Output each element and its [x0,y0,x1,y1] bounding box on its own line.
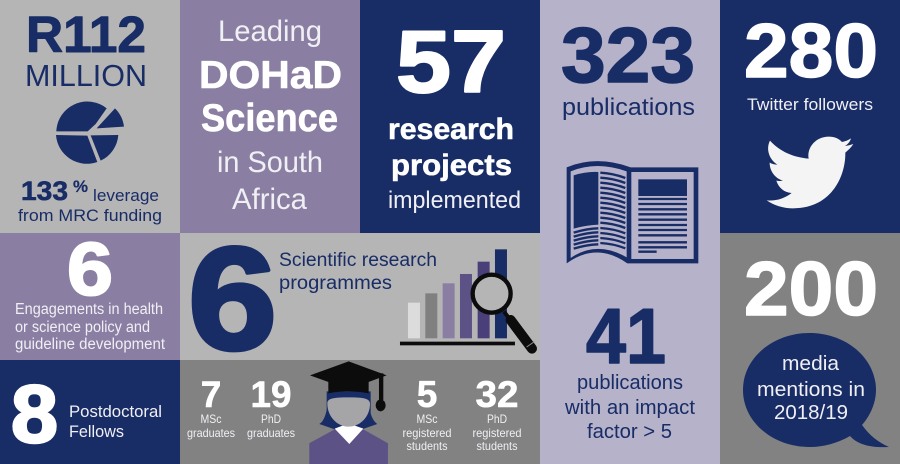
text: media mentions: 2018/19 [774,402,848,424]
panel: twitter [720,0,900,233]
text: impact publications: publications [577,372,683,394]
icon: bar chart with magnifier [400,249,534,349]
stat: 32 PhD registered students: registered [472,426,522,440]
stat: 19 PhD graduates [247,374,295,440]
heading: R112: R112 [26,6,146,63]
text: research projects: projects [391,149,512,182]
stat: 5 MSc registered students: registered [402,426,452,440]
panel: funding [0,0,180,233]
number: big 6: 6 [188,217,277,380]
stat: 19 PhD graduates: graduates [247,426,295,440]
panel: engagements [0,227,180,360]
text: leverage: leverage [93,187,159,205]
number: 6: 6 [67,227,113,311]
text: leading: Leading [218,15,322,48]
icon: speech bubble [743,333,889,447]
panel: graduates [180,360,540,464]
text: publications: publications [562,94,695,121]
text: impact publications [564,372,695,443]
stat: 19 PhD graduates: 19 [250,374,292,415]
text: research projects: research [388,113,514,146]
text: scientific research programmes: Scientific research [279,250,437,271]
heading: million: MILLION [25,58,147,93]
stat: 32 PhD registered students [472,374,522,453]
stat: 5 MSc registered students: 5 [417,374,437,415]
number: 41: 41 [586,292,666,380]
number: 200: 200 [744,247,878,332]
text: impact publications: with an impact [564,397,695,419]
text: engagements: or science policy and [15,319,150,336]
number: 280: 280 [744,9,878,94]
text: scientific research programmes: programmes [279,273,392,294]
stat: 32 PhD registered students: students [476,439,518,453]
text: in South Africa: Africa [232,183,307,216]
text: postdoctoral fellows: Postdoctoral [69,403,162,421]
stat: 7 MSc graduates: MSc [200,412,222,426]
text: leverage: from MRC funding [18,207,162,225]
stat: 32 PhD registered students: PhD [487,412,507,426]
stat: 5 MSc registered students: students [406,439,448,453]
stat: 7 MSc graduates: graduates [187,426,235,440]
icon: graduate [309,361,388,464]
stat: 32 PhD registered students: 32 [476,374,518,415]
icon: pie chart [56,102,124,164]
stat: 19 PhD graduates: PhD [261,412,281,426]
stat: 7 MSc graduates: 7 [201,374,221,415]
panel: leading science [180,0,360,233]
number: 323: 323 [561,11,695,99]
text: media mentions [757,353,865,424]
text: media mentions: mentions in [757,379,865,401]
text: engagements [15,301,166,353]
heading: DOHaD: DOHaD [199,54,342,97]
heading: Science: Science [201,97,338,140]
text: engagements: Engagements in health [15,301,163,318]
stat: 5 MSc registered students [402,374,452,453]
text: in South Africa [217,146,323,216]
panel: publications [540,0,720,464]
number: 57: 57 [396,12,506,111]
panel: research projects [360,0,540,233]
icon: open book [567,161,698,263]
panel: postdoctoral fellows [0,360,180,464]
text: twitter followers: Twitter followers [747,95,873,114]
text: postdoctoral fellows [69,403,162,441]
text: postdoctoral fellows: Fellows [69,423,124,441]
text: leverage: 133 [21,176,68,206]
text: impact publications: factor > 5 [587,421,672,443]
text: research projects [388,113,514,182]
number: 8: 8 [11,369,58,460]
icon: twitter bird [767,137,853,208]
text: leverage: % [73,177,88,196]
panel: media mentions [720,233,900,464]
stat: 5 MSc registered students: MSc [416,412,438,426]
text: scientific research programmes [279,250,437,294]
text: media mentions: media [782,353,840,375]
text: in South Africa: in South [217,146,323,179]
stat: 7 MSc graduates [187,374,235,440]
panel: research programmes [180,217,540,380]
text: leverage [18,176,162,225]
text: implemented: implemented [388,187,521,214]
text: engagements: guideline development [15,336,166,353]
